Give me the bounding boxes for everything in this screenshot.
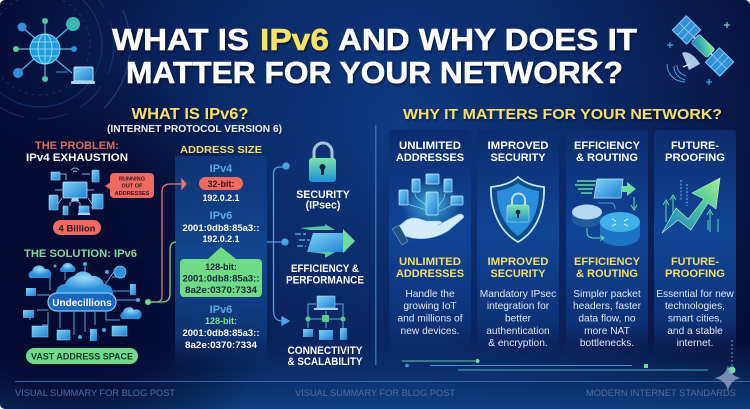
label: efficiency and performance (286, 263, 364, 286)
panel: address size: 128-bit: (205, 316, 237, 326)
panel: address size: IPv6 (210, 304, 232, 316)
panel: improved security: Mandatory IPsec (480, 289, 556, 300)
panel: efficiency and routing: data flow, no (578, 314, 636, 324)
panel: efficiency and routing: Simpler packet (573, 289, 641, 300)
icon: cloud network (23, 262, 142, 341)
panel: efficiency and routing: & ROUTING (576, 152, 638, 164)
panel: unlimited addresses: ADDRESSES (396, 268, 464, 280)
panel: future-proofing (654, 130, 736, 356)
icon: hand with devices (392, 174, 464, 245)
heading: the solution: THE SOLUTION: IPv6 (24, 248, 137, 260)
heading: why it matters: WHY IT MATTERS FOR YOUR NETWORK? (403, 106, 722, 123)
panel: efficiency and routing: more NAT (584, 326, 630, 337)
heading: the problem (26, 140, 128, 164)
footer: VISUAL SUMMARY FOR BLOG POST (15, 388, 175, 399)
label: efficiency and performance: EFFICIENCY & (291, 263, 359, 275)
icon: routers and packet (572, 179, 640, 246)
arrow: problem and solution to address size (145, 180, 186, 305)
heading: what is IPv6: WHAT IS IPv6? (132, 106, 248, 123)
panel: improved security: SECURITY (490, 152, 546, 164)
icon: shield with lock (491, 177, 544, 242)
title: MATTER FOR YOUR NETWORK? (126, 55, 623, 90)
label: efficiency and performance: PERFORMANCE (286, 274, 364, 286)
heading: the problem: IPv4 EXHAUSTION (26, 152, 128, 164)
title: IPv6 (260, 22, 329, 57)
icon: satellite (667, 16, 734, 85)
panel: future-proofing: PROOFING (665, 152, 725, 164)
callout: 128-bit green: 128-bit: (205, 262, 237, 272)
panel: unlimited addresses: and millions of (397, 314, 463, 324)
heading: the problem: THE PROBLEM: (35, 140, 119, 152)
panel: unlimited addresses (389, 130, 471, 356)
title (112, 22, 637, 90)
circuit accent lines (402, 340, 736, 374)
callout: running out of addresses: ADDRESSES (115, 191, 150, 197)
panel: improved security: integration for (487, 301, 550, 312)
panel: efficiency and routing: bottlenecks. (580, 338, 634, 349)
panel: address size: IPv6 (210, 210, 232, 222)
panel: unlimited addresses: UNLIMITED (399, 140, 461, 152)
panel: address size: 192.0.2.1 (202, 193, 240, 203)
panel: future-proofing: and a stable (667, 326, 723, 337)
callout: running out of addresses (105, 173, 154, 198)
panel: efficiency and routing: & ROUTING (576, 268, 638, 280)
panel: future-proofing: Essential for new (656, 289, 734, 300)
panel: future-proofing: smart cities, (668, 314, 722, 324)
footer (15, 381, 750, 399)
callout: running out of addresses: RUNNING (119, 176, 145, 182)
panel: address size: IPv4 (210, 163, 233, 175)
heading: what is IPv6 (107, 106, 282, 135)
panel: improved security (477, 130, 559, 356)
panel: address size: 32-bit: (208, 179, 235, 189)
badge: 4 billion (53, 220, 101, 235)
label: security (296, 189, 350, 212)
label: security: (IPsec) (306, 200, 340, 212)
callout: running out of addresses: OUT OF (121, 184, 143, 190)
icon: sparkle (714, 365, 741, 391)
callout: 128-bit green: 8a2e:0370:7334 (185, 285, 257, 295)
panel: future-proofing: PROOFING (665, 268, 725, 280)
panel: address size: 8a2e:0370:7334 (185, 340, 257, 350)
badge: vast address space: VAST ADDRESS SPACE (31, 352, 133, 362)
panel: address size: ADDRESS SIZE (180, 144, 262, 156)
panel: future-proofing: FUTURE- (671, 256, 719, 268)
panel: future-proofing: internet. (677, 338, 713, 349)
panel: address size: 2001:0db8:85a3:: (182, 328, 260, 338)
panel: improved security: IMPROVED (488, 140, 549, 152)
heading: what is IPv6: (INTERNET PROTOCOL VERSION 6) (107, 124, 282, 135)
label: connectivity and scalability: CONNECTIVITY (288, 345, 362, 357)
icon: growth arrow (662, 178, 720, 233)
panel: improved security: authentication (486, 326, 550, 337)
panel: unlimited addresses: new devices. (401, 326, 459, 337)
panel: future-proofing: technologies, (665, 301, 725, 312)
panel: address size (175, 144, 267, 370)
panel: efficiency and routing: headers, faster (573, 301, 642, 312)
callout: 128-bit green (180, 247, 262, 297)
panel: efficiency and routing (566, 130, 648, 356)
panel: efficiency and routing: EFFICIENCY (574, 140, 640, 152)
arrow: address size to benefits (267, 163, 289, 325)
title: WHAT IS (112, 22, 249, 57)
panel: unlimited addresses: UNLIMITED (399, 256, 461, 268)
callout: 128-bit green: 2001:0db8:85a3:: (182, 274, 260, 284)
footer: MODERN INTERNET STANDARDS (586, 388, 736, 399)
panel: improved security: SECURITY (490, 268, 546, 280)
title: AND WHY DOES IT (338, 22, 637, 57)
icon: network tree (303, 296, 347, 340)
icon: devices (49, 168, 103, 215)
panel: unlimited addresses: ADDRESSES (396, 152, 464, 164)
icon: padlock (309, 143, 336, 182)
footer: VISUAL SUMMARY FOR BLOG POST (295, 388, 455, 399)
panel: efficiency and routing: EFFICIENCY (574, 256, 640, 268)
panel: unlimited addresses: Handle the (405, 289, 455, 300)
icon: fast arrow (295, 224, 355, 258)
icon: network globe (13, 17, 95, 84)
badge: 4 billion: 4 Billion (59, 224, 96, 234)
panel: address size: 2001:0db8:85a3:: (182, 223, 260, 233)
label: connectivity and scalability: & SCALABILITY (288, 356, 362, 368)
panel: future-proofing: FUTURE- (671, 140, 719, 152)
panel: improved security: IMPROVED (488, 256, 549, 268)
panel: improved security: & encryption. (488, 338, 548, 349)
icon: cloud network: Undecillions (52, 298, 112, 309)
panel: address size: 192.0.2.1 (202, 234, 240, 244)
label: connectivity and scalability (288, 345, 362, 368)
panel: unlimited addresses: growing IoT (403, 301, 457, 312)
divider (375, 125, 376, 365)
label: security: SECURITY (296, 189, 350, 201)
panel: improved security: better (505, 314, 532, 324)
badge: vast address space (26, 348, 138, 364)
